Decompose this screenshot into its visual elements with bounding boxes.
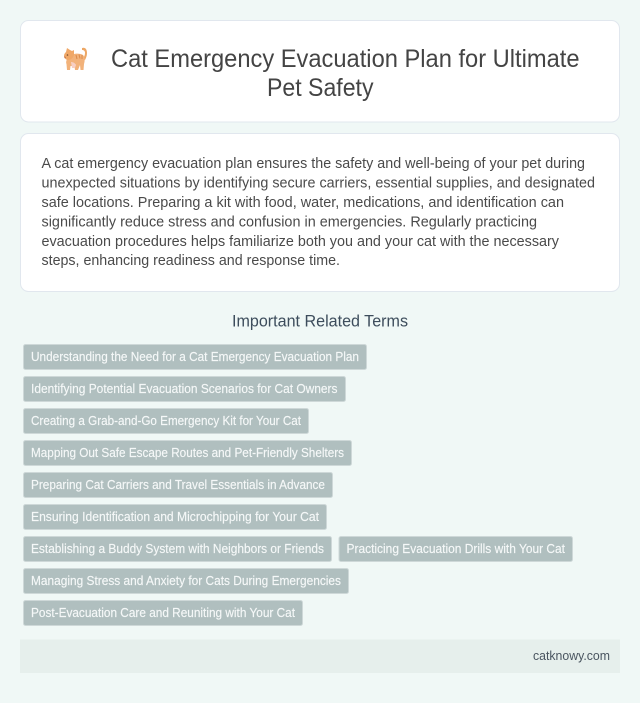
tag: buddy system: Establishing a Buddy System with Neighbors or Friends xyxy=(31,542,324,556)
panel: introduction paragraph xyxy=(20,134,620,292)
text block: description: safe locations. Preparing a kit with food, water, medications, and identification can xyxy=(42,194,564,211)
tag: evacuation drills: Practicing Evacuation Drills with Your Cat xyxy=(346,542,566,556)
tag: emergency kit: Creating a Grab-and-Go Emergency Kit for Your Cat xyxy=(31,414,301,428)
text block: description: unexpected situations by identifying secure carriers, essential supplies, and designated xyxy=(42,174,595,192)
title: Cat Emergency Evacuation Plan for Ultimate xyxy=(111,45,580,73)
text block: description xyxy=(42,155,595,269)
footer xyxy=(20,640,620,673)
tag: understanding the need xyxy=(24,344,366,370)
title xyxy=(111,45,580,102)
tag: escape routes: Mapping Out Safe Escape Routes and Pet-Friendly Shelters xyxy=(31,446,344,460)
tag: managing stress: Managing Stress and Anxiety for Cats During Emergencies xyxy=(31,574,341,588)
heading: important related terms: Important Related Terms xyxy=(232,312,408,330)
text block: description: A cat emergency evacuation plan ensures the safety and well-being of your pet during xyxy=(42,155,585,172)
text block: description: evacuation procedures helps familiarize both you and your cat with the necessary xyxy=(42,233,559,250)
tag: microchipping xyxy=(24,504,326,530)
footer: catknowy.com xyxy=(533,649,610,663)
tag: managing stress xyxy=(24,568,348,594)
title: Pet Safety xyxy=(267,74,374,102)
text block: description: steps, enhancing readiness and response time. xyxy=(42,252,340,269)
tag: post-evacuation care: Post-Evacuation Care and Reuniting with Your Cat xyxy=(31,606,295,620)
tag: evacuation scenarios xyxy=(24,376,346,402)
tag: buddy system xyxy=(24,536,332,562)
tag: cat carriers: Preparing Cat Carriers and Travel Essentials in Advance xyxy=(31,478,325,492)
tag: post-evacuation care xyxy=(24,600,302,626)
tag: evacuation drills xyxy=(339,536,572,562)
panel: title card xyxy=(20,20,620,122)
tag: evacuation scenarios: Identifying Potential Evacuation Scenarios for Cat Owners xyxy=(31,382,338,396)
tag list xyxy=(24,344,572,626)
tag: emergency kit xyxy=(24,408,308,434)
icon: cat xyxy=(64,48,87,70)
tag: escape routes xyxy=(24,440,352,466)
tag: understanding the need: Understanding the Need for a Cat Emergency Evacuation Plan xyxy=(31,350,359,364)
text block: description: significantly reduce stress and confusion in emergencies. Regularly practicing xyxy=(42,214,537,230)
tag: cat carriers xyxy=(24,472,332,498)
tag: microchipping: Ensuring Identification and Microchipping for Your Cat xyxy=(31,510,320,524)
